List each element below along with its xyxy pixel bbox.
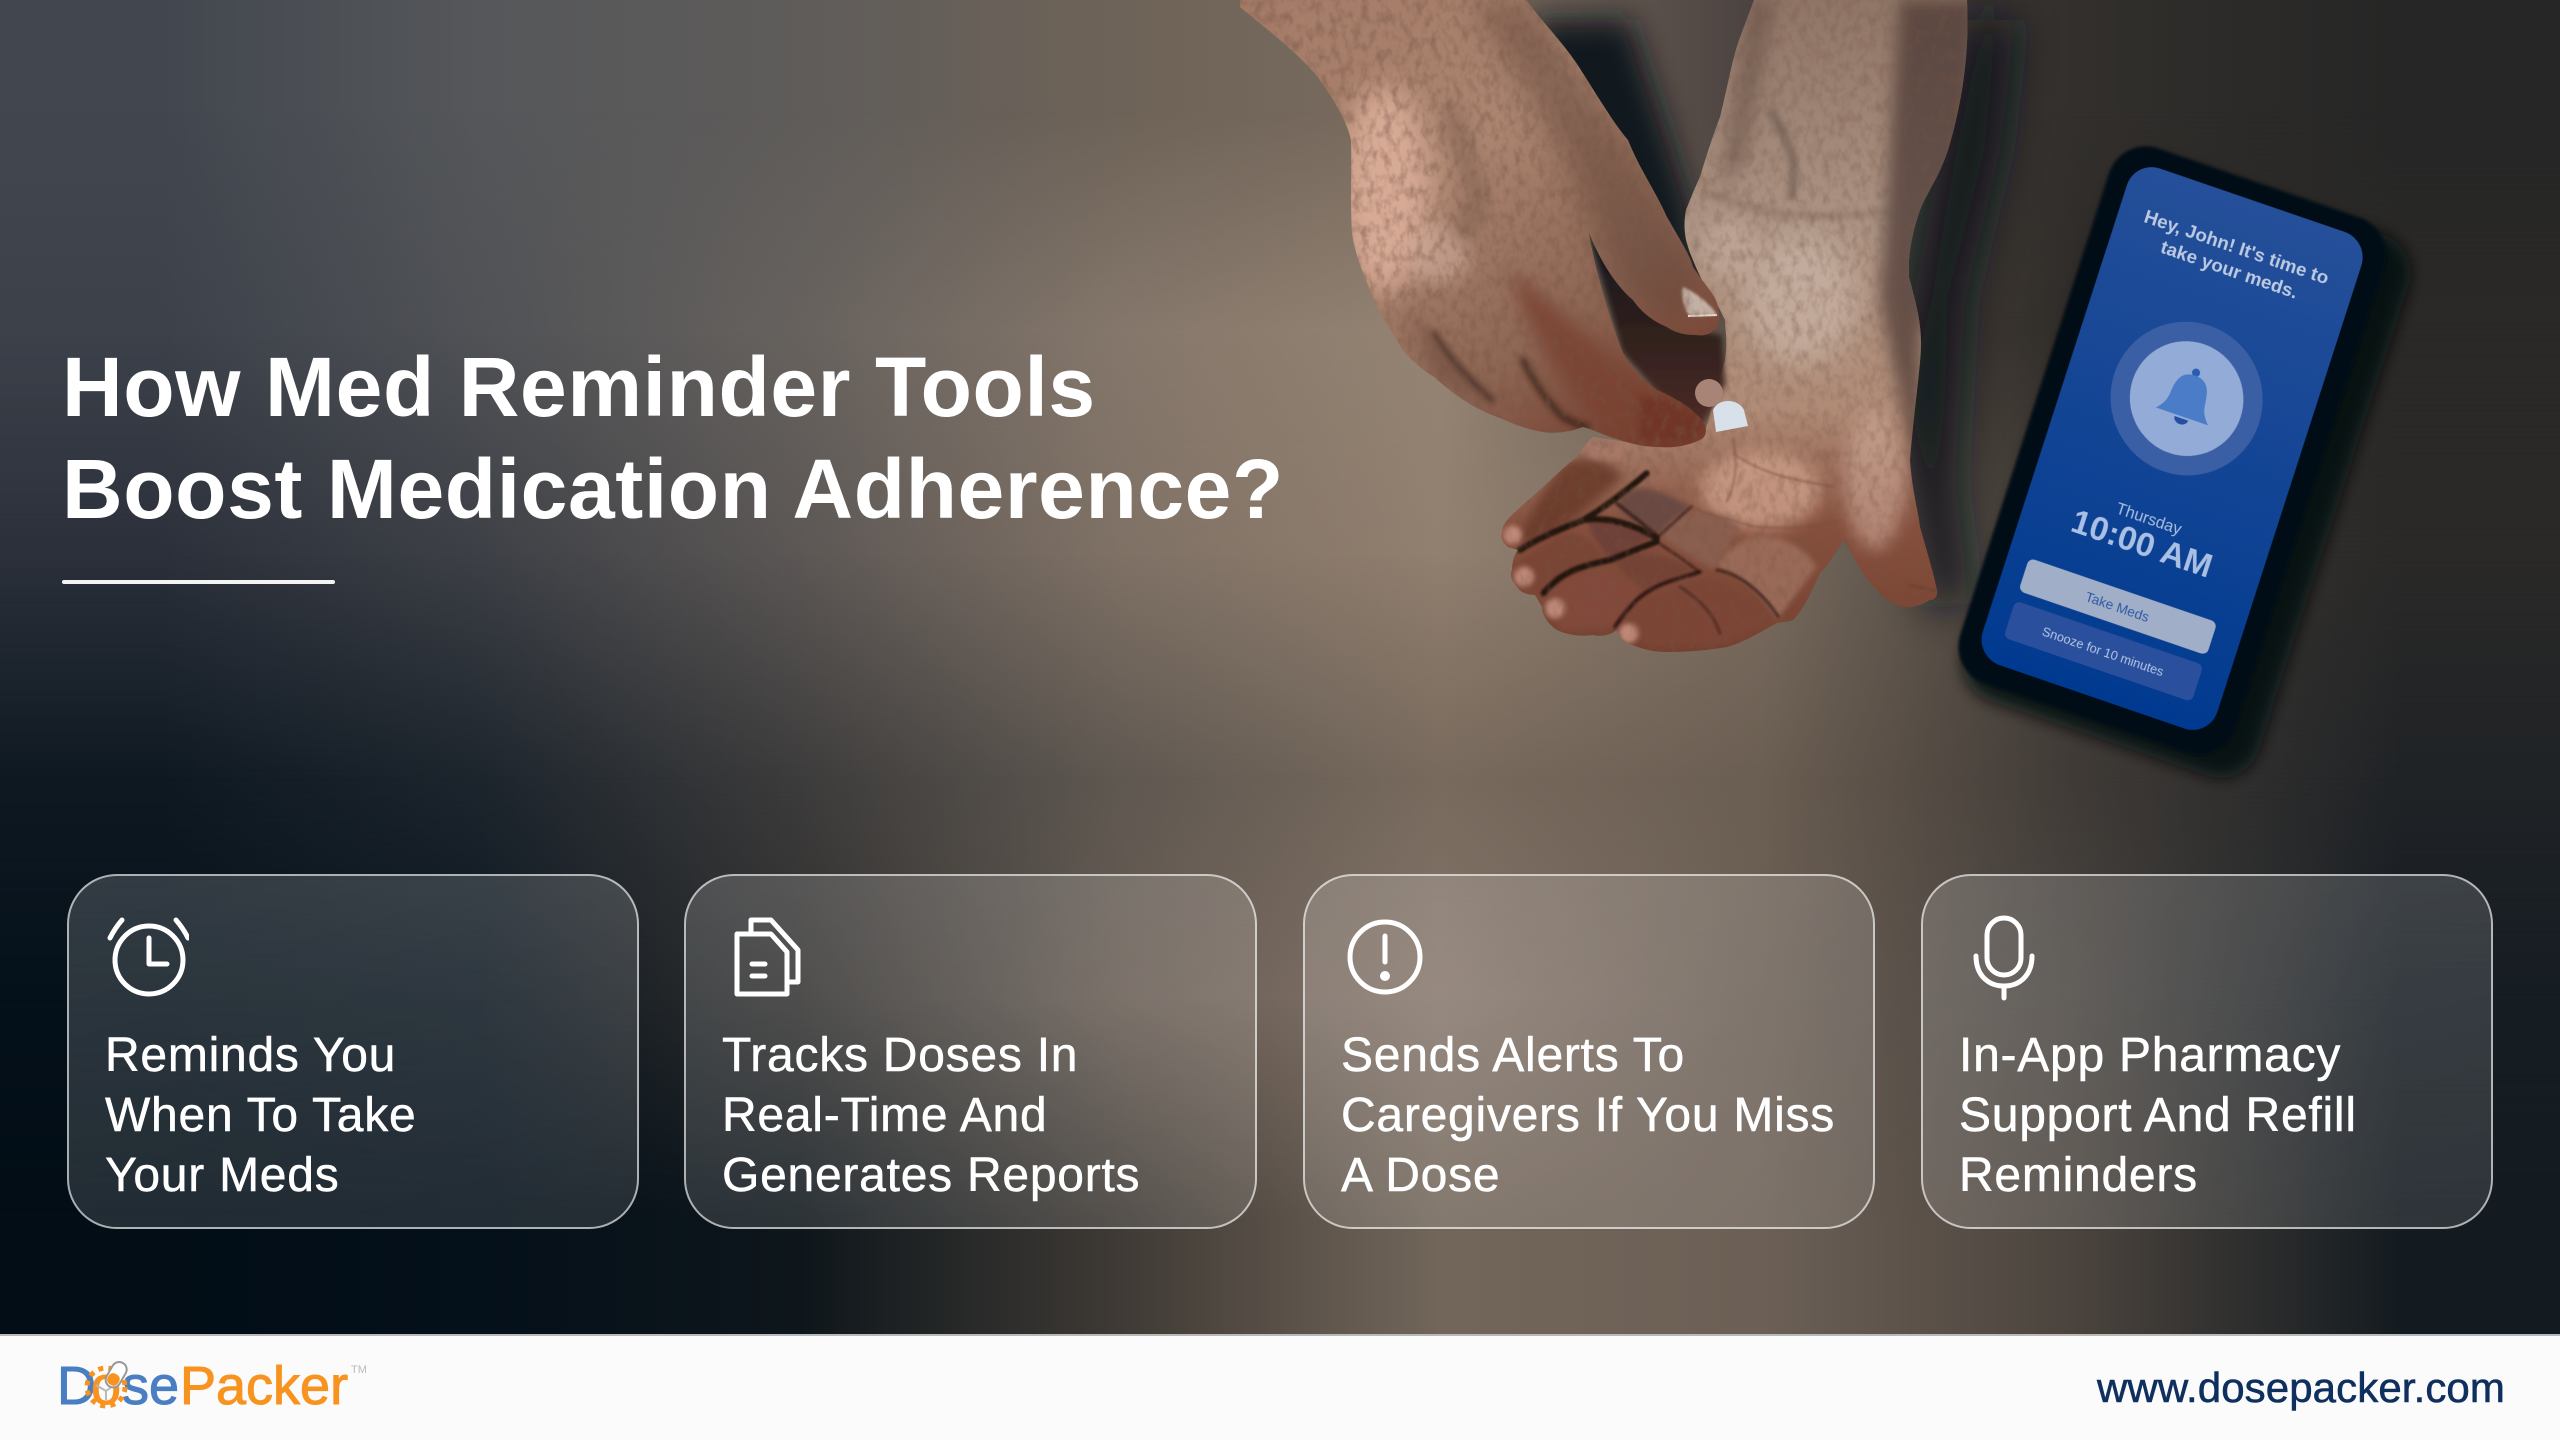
DosePacker logo: o — [91, 1356, 121, 1416]
card text: In-App Pharmacy — [1959, 1029, 2341, 1082]
card text — [104, 1029, 416, 1202]
card: dose tracking — [684, 874, 1257, 1229]
pills — [1695, 379, 1748, 432]
card: reminders — [67, 874, 639, 1229]
smartphone — [1944, 136, 2423, 789]
card text — [1959, 1029, 2357, 1202]
card text — [1340, 1029, 1835, 1202]
card text: A Dose — [1341, 1149, 1500, 1202]
lower hand: open palm — [1480, 0, 1980, 670]
time label: 10:00 AM — [2067, 503, 2217, 586]
upper hand: pinching fingers — [1230, 0, 1730, 460]
title — [62, 340, 1284, 536]
card text — [722, 1029, 1140, 1202]
card text: Tracks Doses In — [722, 1029, 1078, 1082]
card text: Your Meds — [105, 1149, 339, 1202]
cupped fingers — [1503, 440, 1937, 647]
DosePacker logo — [57, 1356, 367, 1416]
snooze button — [2003, 601, 2204, 702]
card text: Reminders — [1959, 1149, 2198, 1202]
title: Boost Medication Adherence? — [62, 442, 1284, 536]
DosePacker logo: se — [122, 1356, 179, 1416]
bell badge — [2091, 301, 2282, 496]
icon: gear and capsule — [84, 1361, 128, 1408]
card text: Sends Alerts To — [1341, 1029, 1685, 1082]
card text: Generates Reports — [722, 1149, 1140, 1202]
weekday label: Thursday — [2114, 500, 2184, 539]
card: caregiver alerts — [1303, 874, 1875, 1229]
DosePacker logo: Packer — [180, 1356, 348, 1416]
greeting text line two: take your meds. — [2158, 236, 2301, 303]
phone body — [1949, 136, 2396, 766]
shadow between and beside the hands — [1530, 20, 2015, 610]
card text: Reminds You — [105, 1029, 396, 1082]
card text: Support And Refill — [1959, 1089, 2357, 1142]
icon: alarm clock — [108, 918, 189, 996]
thumb nail — [1682, 287, 1717, 316]
icon: documents — [734, 918, 800, 996]
DosePacker logo: D — [57, 1356, 96, 1416]
DosePacker logo: TM — [351, 1364, 367, 1376]
take meds button: Take Meds — [2083, 589, 2151, 625]
card text: When To Take — [105, 1089, 416, 1142]
website url: www.dosepacker.com — [2097, 1364, 2505, 1411]
snooze button: Snooze for 10 minutes — [2040, 624, 2165, 679]
phone shadow — [1952, 146, 2421, 789]
icon: exclamation circle — [1348, 920, 1422, 994]
footer bar — [0, 1334, 2560, 1440]
card text: Caregivers If You Miss — [1341, 1089, 1835, 1142]
title underline — [62, 580, 335, 584]
phone screen — [1975, 160, 2369, 737]
card: pharmacy support — [1921, 874, 2493, 1229]
icon: microphone — [1974, 916, 2034, 1000]
card text: Real-Time And — [722, 1089, 1047, 1142]
title: How Med Reminder Tools — [62, 340, 1096, 434]
take meds button — [2018, 558, 2217, 655]
thumb nail — [1908, 585, 1937, 591]
dark pocket under the pinching thumb — [1590, 235, 1725, 425]
greeting text: Hey, John! It's time to — [2142, 206, 2331, 289]
